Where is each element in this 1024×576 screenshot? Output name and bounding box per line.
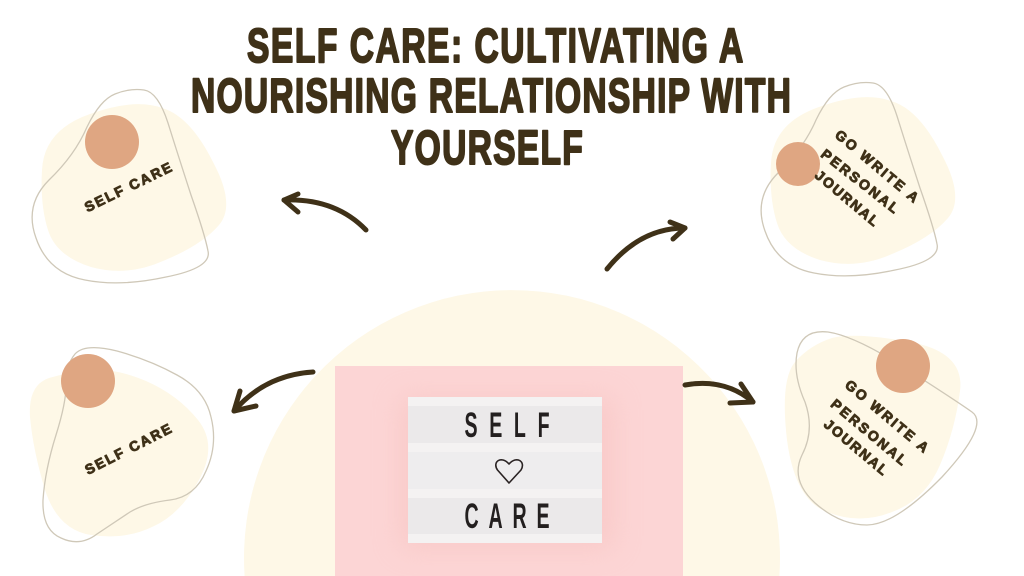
panel: bottom-right journal blob: PERSONAL <box>828 396 910 469</box>
panel: top-left self care blob <box>32 90 226 283</box>
panel: top-right journal blob: GO WRITE A <box>832 126 922 206</box>
panel: bottom-right journal blob: GO WRITE A <box>842 376 932 456</box>
lightbox board: CARE <box>464 497 550 537</box>
arrow: to bottom-right blob <box>685 383 753 403</box>
title: NOURISHING RELATIONSHIP WITH <box>191 68 791 122</box>
panel: top-right journal blob: PERSONAL <box>818 146 902 217</box>
title <box>191 18 791 174</box>
lightbox board: SELF <box>464 406 550 446</box>
arrow: to top-left blob <box>284 194 366 230</box>
panel: bottom-right journal blob <box>785 332 977 525</box>
lightbox board <box>408 397 602 543</box>
panel: bottom-left self care blob: SELF CARE <box>82 420 174 478</box>
panel: top-left self care blob: SELF CARE <box>82 159 174 215</box>
arrow: to bottom-left blob <box>234 372 313 411</box>
panel: bottom-left self care blob <box>30 348 214 542</box>
icon: heart <box>496 460 522 483</box>
panel: top-right journal blob <box>761 82 955 276</box>
title: YOURSELF <box>391 120 583 174</box>
panel: bottom-right journal blob: JOURNAL <box>821 416 891 478</box>
arrow: to top-right blob <box>607 222 685 269</box>
photo: pink background with lightbox <box>335 366 683 576</box>
semicircle backdrop <box>244 290 780 576</box>
title: SELF CARE: CULTIVATING A <box>247 18 743 72</box>
panel: top-right journal blob: JOURNAL <box>812 167 882 229</box>
